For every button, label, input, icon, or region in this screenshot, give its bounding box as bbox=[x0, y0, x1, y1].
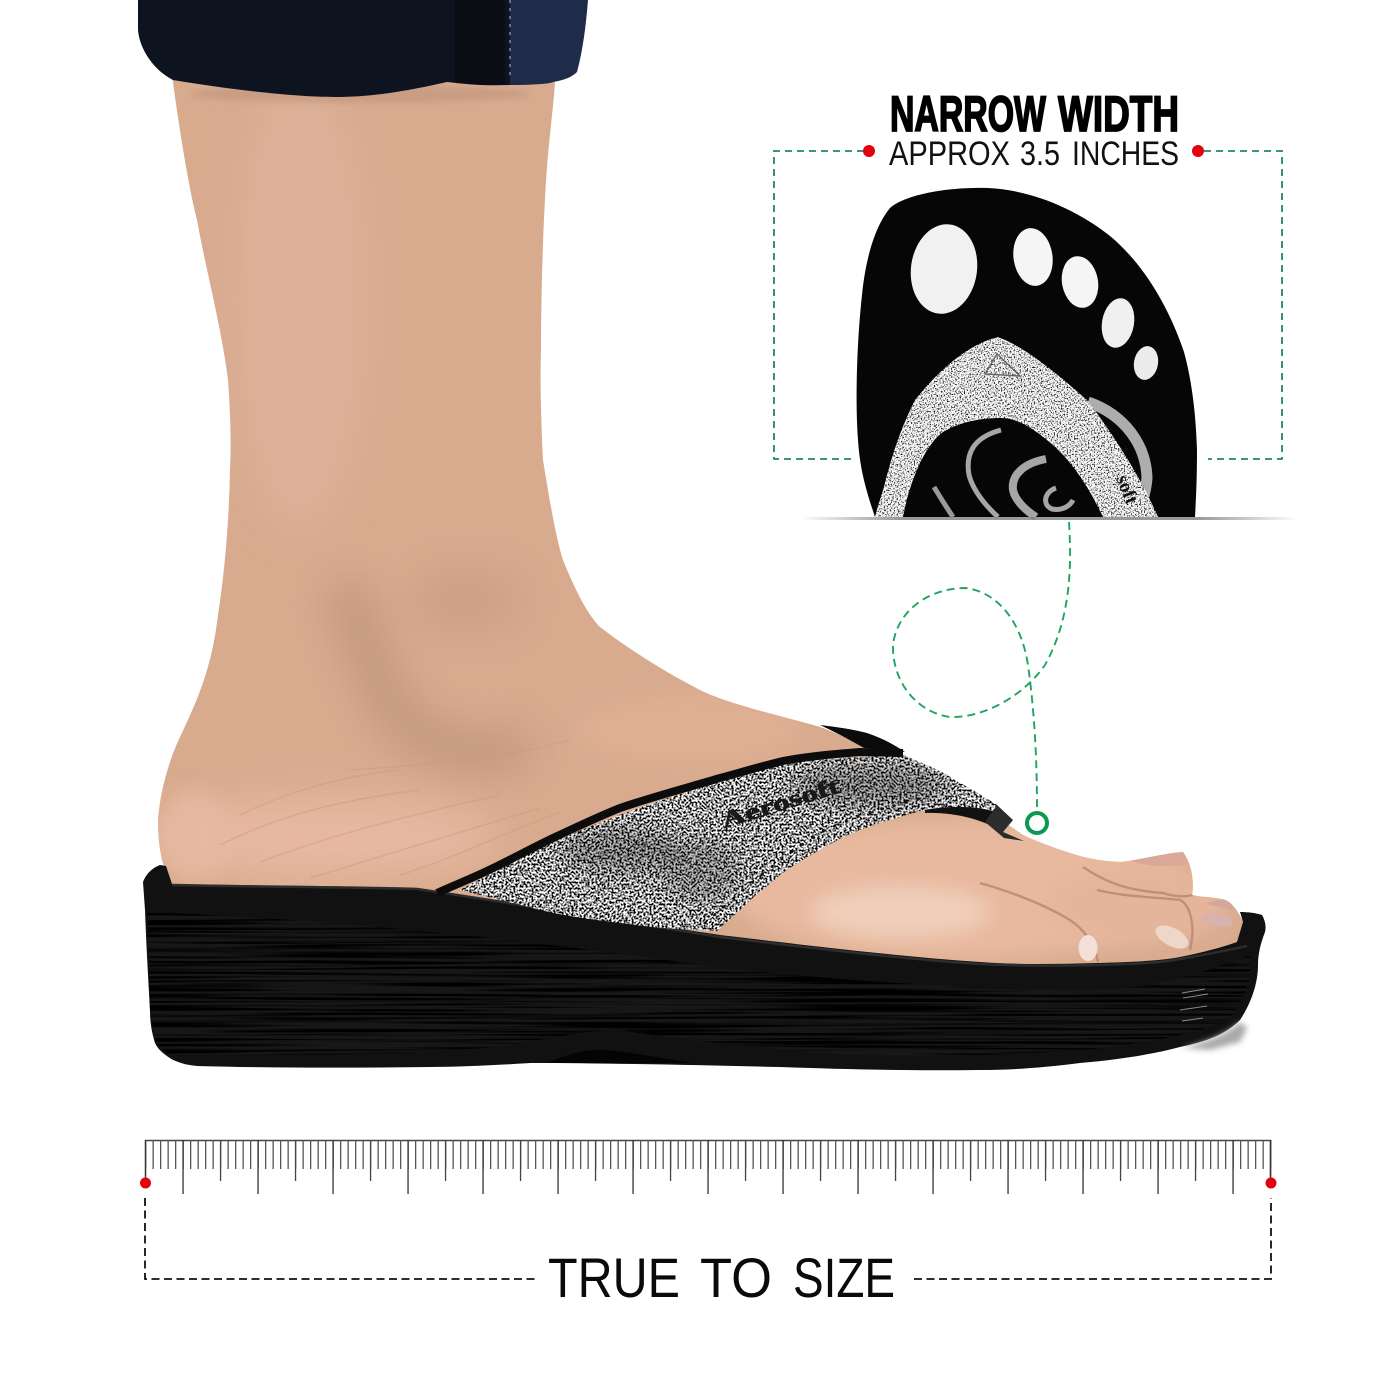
inner sole rim bbox=[172, 885, 1247, 966]
sandal thong strap bbox=[437, 725, 1024, 931]
black piping bbox=[437, 752, 903, 893]
strap tip bbox=[985, 805, 1024, 841]
foot upper bbox=[716, 696, 794, 720]
inset heading: WIDTH bbox=[1058, 86, 1179, 142]
sole grain lines bbox=[147, 912, 1250, 1056]
toe print 3 bbox=[1058, 253, 1102, 311]
end ticks bbox=[146, 1140, 1270, 1183]
front sole sheen bbox=[1180, 989, 1208, 1021]
red dot left bbox=[863, 145, 875, 157]
toe print 4 bbox=[1098, 296, 1138, 350]
ruler bbox=[140, 1140, 1276, 1188]
toenail big bbox=[1078, 935, 1098, 961]
green dashed connector loop bbox=[893, 522, 1070, 833]
width measurement label: APPROX bbox=[889, 135, 1010, 173]
black dashed size bracket bbox=[145, 1198, 1271, 1279]
sandal wedge sole bbox=[143, 865, 1266, 1070]
medium ticks bbox=[220, 1140, 1272, 1181]
toenail second bbox=[1156, 925, 1188, 949]
strap dark mottling bbox=[560, 763, 950, 900]
toe creases bbox=[980, 867, 1193, 962]
glitter strap bbox=[875, 337, 1158, 517]
width measurement label: 3.5 bbox=[1020, 135, 1060, 173]
toenail third bbox=[1202, 913, 1232, 927]
size label: TO bbox=[700, 1246, 772, 1309]
brand on inset strap: soft bbox=[1111, 472, 1142, 508]
toe print 2 bbox=[1010, 226, 1056, 288]
short ticks bbox=[145, 1140, 1272, 1169]
inset heading: NARROW bbox=[890, 86, 1047, 142]
size label bbox=[548, 1246, 895, 1309]
black arch under sole bbox=[547, 1050, 693, 1063]
ruler left dot bbox=[140, 1178, 151, 1188]
trouser cuff bbox=[138, 0, 588, 97]
ankle hollow shading bbox=[340, 585, 525, 753]
glitter band bbox=[460, 755, 1000, 931]
big toe print bbox=[905, 220, 983, 318]
toenail fourth bbox=[1205, 900, 1235, 911]
leg and foot bbox=[140, 60, 1260, 980]
size label: SIZE bbox=[793, 1246, 895, 1309]
leg top shadow bbox=[190, 85, 530, 103]
heel and wrinkled skin bbox=[140, 798, 500, 878]
inset: sandal top view bbox=[857, 188, 1197, 517]
toe print 5 bbox=[1131, 344, 1161, 382]
red dot right bbox=[1192, 145, 1204, 157]
strap logo bbox=[985, 354, 1020, 376]
strap back loop bbox=[820, 725, 905, 752]
long ticks bbox=[182, 1140, 1272, 1194]
inset ground shadow bbox=[800, 517, 1298, 520]
black footbed bbox=[857, 188, 1197, 517]
ruler right dot bbox=[1266, 1178, 1276, 1188]
brand on strap: Aerosoft bbox=[718, 773, 843, 833]
width measurement label: INCHES bbox=[1072, 135, 1179, 173]
strap perforation row bbox=[705, 798, 922, 923]
size label: TRUE bbox=[548, 1246, 680, 1309]
toenail small toe bbox=[1130, 852, 1184, 866]
footbed arch outline bbox=[1088, 402, 1147, 506]
width measurement label bbox=[889, 135, 1179, 173]
green ring marker bbox=[1027, 813, 1047, 833]
footbed swirls bbox=[968, 430, 1001, 517]
strap lower black edge bbox=[925, 807, 1002, 832]
sole floor shadow bbox=[1182, 1022, 1247, 1050]
leg lighter left side bbox=[260, 116, 340, 485]
green dashed width bracket bbox=[774, 145, 1282, 459]
